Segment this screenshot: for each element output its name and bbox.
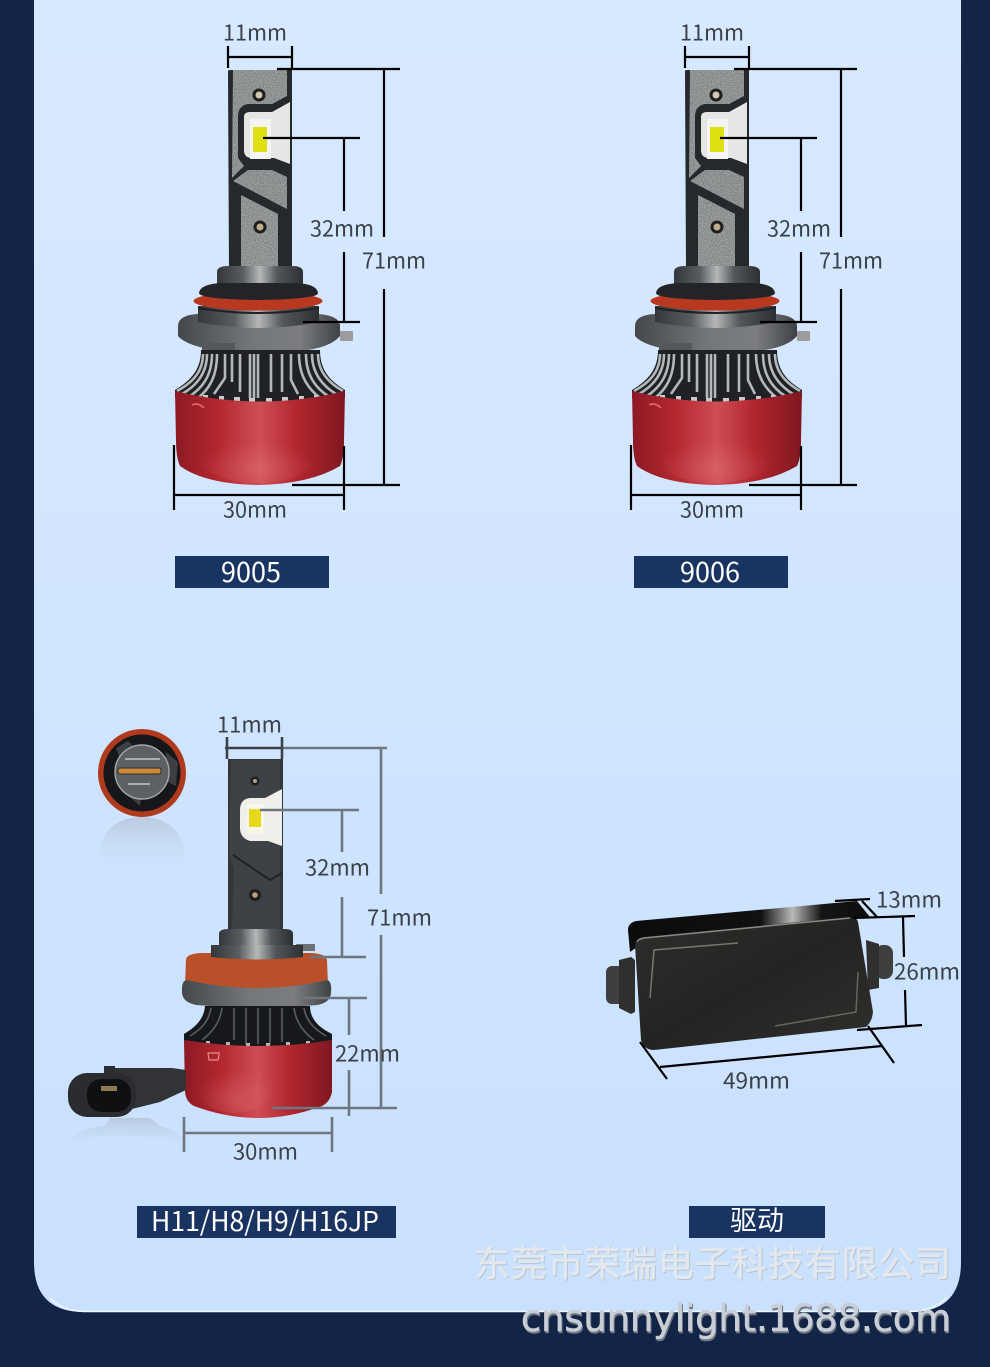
heatsink fins <box>175 350 345 405</box>
rivets <box>252 88 266 102</box>
label 11mm: 11mm <box>223 16 287 48</box>
embossed groove left <box>650 943 738 998</box>
LED emitter <box>253 127 267 152</box>
flange <box>178 314 340 353</box>
right connector block <box>866 940 879 990</box>
model tag: 9006 <box>634 551 788 590</box>
32mm lines <box>260 810 366 957</box>
lower plate edge <box>233 855 282 880</box>
71mm lines <box>272 748 397 1108</box>
silver plates <box>232 70 287 270</box>
clip <box>104 1066 115 1074</box>
32mm lines <box>263 138 360 322</box>
71mm lines <box>277 69 400 485</box>
stem <box>228 759 283 934</box>
model tag: driver: 驱动 <box>730 1199 784 1238</box>
26mm lines <box>857 917 922 1030</box>
71mm lines <box>734 69 857 485</box>
side tab <box>340 331 353 341</box>
49mm lines <box>640 1026 894 1079</box>
neck <box>198 306 319 328</box>
red cup highlight <box>198 427 318 483</box>
lock tabs <box>116 741 178 806</box>
plug pin <box>101 1086 117 1091</box>
front tab <box>202 343 235 353</box>
label 11mm: 11mm <box>217 708 282 740</box>
label 30mm: 30mm <box>223 492 287 524</box>
red cup <box>175 391 345 485</box>
plug body <box>68 1073 136 1117</box>
label 11mm: 11mm <box>680 16 744 48</box>
stem shade <box>229 760 280 930</box>
11mm lines <box>228 46 292 68</box>
label 30mm: 30mm <box>233 1134 298 1166</box>
model tag: driver <box>689 1199 825 1238</box>
30mm lines <box>184 1117 332 1152</box>
model tag: 9005 <box>175 551 329 590</box>
model tag: 9006: 9006 <box>680 551 740 590</box>
reflection <box>98 817 186 874</box>
cable <box>110 1068 186 1112</box>
wiring connector <box>66 1066 186 1152</box>
LED emitter <box>249 809 261 827</box>
collar <box>217 266 303 288</box>
seat <box>199 283 318 300</box>
case highlight <box>637 918 850 942</box>
label 22mm: 22mm <box>335 1036 400 1068</box>
11mm lines <box>685 46 749 68</box>
orange band <box>185 953 328 992</box>
label 32mm: 32mm <box>767 212 831 244</box>
label 71mm: 71mm <box>362 244 426 276</box>
metal highlights <box>125 759 160 784</box>
32mm lines <box>720 138 817 322</box>
left connector block <box>619 957 635 1014</box>
13mm lines <box>835 899 915 918</box>
dimensions: 9005 <box>174 16 426 524</box>
reflection <box>66 1118 186 1152</box>
LED chip <box>250 119 271 159</box>
model tag: 9005: 9005 <box>221 551 281 590</box>
22mm lines <box>300 998 367 1116</box>
ceramic panel <box>244 102 290 164</box>
collar <box>219 929 293 950</box>
front case <box>635 917 873 1050</box>
11mm lines <box>225 737 282 759</box>
plug rim <box>115 745 169 799</box>
dimensions: driver <box>640 882 960 1096</box>
label 32mm: 32mm <box>305 850 370 882</box>
orange rim <box>98 729 186 817</box>
ceramic panel <box>240 789 282 846</box>
glossy back plate <box>628 901 870 952</box>
heatsink fins <box>184 1006 332 1047</box>
side tab <box>296 944 315 951</box>
grey plug <box>115 745 169 799</box>
rivets <box>250 776 260 786</box>
dimensions: 9006 <box>631 16 883 524</box>
red cup notch <box>208 1053 219 1060</box>
model tag: H11/H8/H9/H16JP: H11/H8/H9/H16JP <box>151 1200 379 1239</box>
label 30mm: 30mm <box>680 492 744 524</box>
embossed groove right <box>775 972 858 1026</box>
amber slot <box>118 768 161 774</box>
label 71mm: 71mm <box>819 244 883 276</box>
watermark: company name: 东莞市荣瑞电子科技有限公司 <box>474 1235 951 1287</box>
watermark: website: cnsunnylight.1688.com <box>521 1297 951 1340</box>
product: driver box <box>606 901 893 1050</box>
red cup highlight <box>195 1057 275 1113</box>
bulb socket end view <box>98 729 186 874</box>
right connector plug <box>875 945 893 979</box>
30mm lines <box>174 445 344 510</box>
label 32mm: 32mm <box>310 212 374 244</box>
left connector plug <box>606 966 624 1004</box>
label 13mm: 13mm <box>876 882 942 914</box>
panel bottom highlight <box>50 1297 947 1312</box>
label 71mm: 71mm <box>367 900 432 932</box>
LED chip <box>247 804 264 833</box>
flange <box>182 980 331 1008</box>
label 26mm: 26mm <box>894 954 960 986</box>
product: 9005 bulb <box>175 70 353 485</box>
product: 9006 bulb <box>632 70 810 485</box>
lower collar <box>211 945 303 960</box>
30mm lines <box>631 445 801 510</box>
stem <box>228 70 292 270</box>
O-ring shadow <box>198 308 319 313</box>
red cup <box>184 1040 332 1118</box>
product: H11 bulb <box>182 759 332 1118</box>
dimensions: H11 <box>184 708 432 1166</box>
O-ring <box>194 292 322 310</box>
plug opening <box>87 1079 131 1112</box>
label 49mm: 49mm <box>723 1064 790 1096</box>
red cup notch <box>192 404 204 408</box>
black inner <box>104 734 180 812</box>
